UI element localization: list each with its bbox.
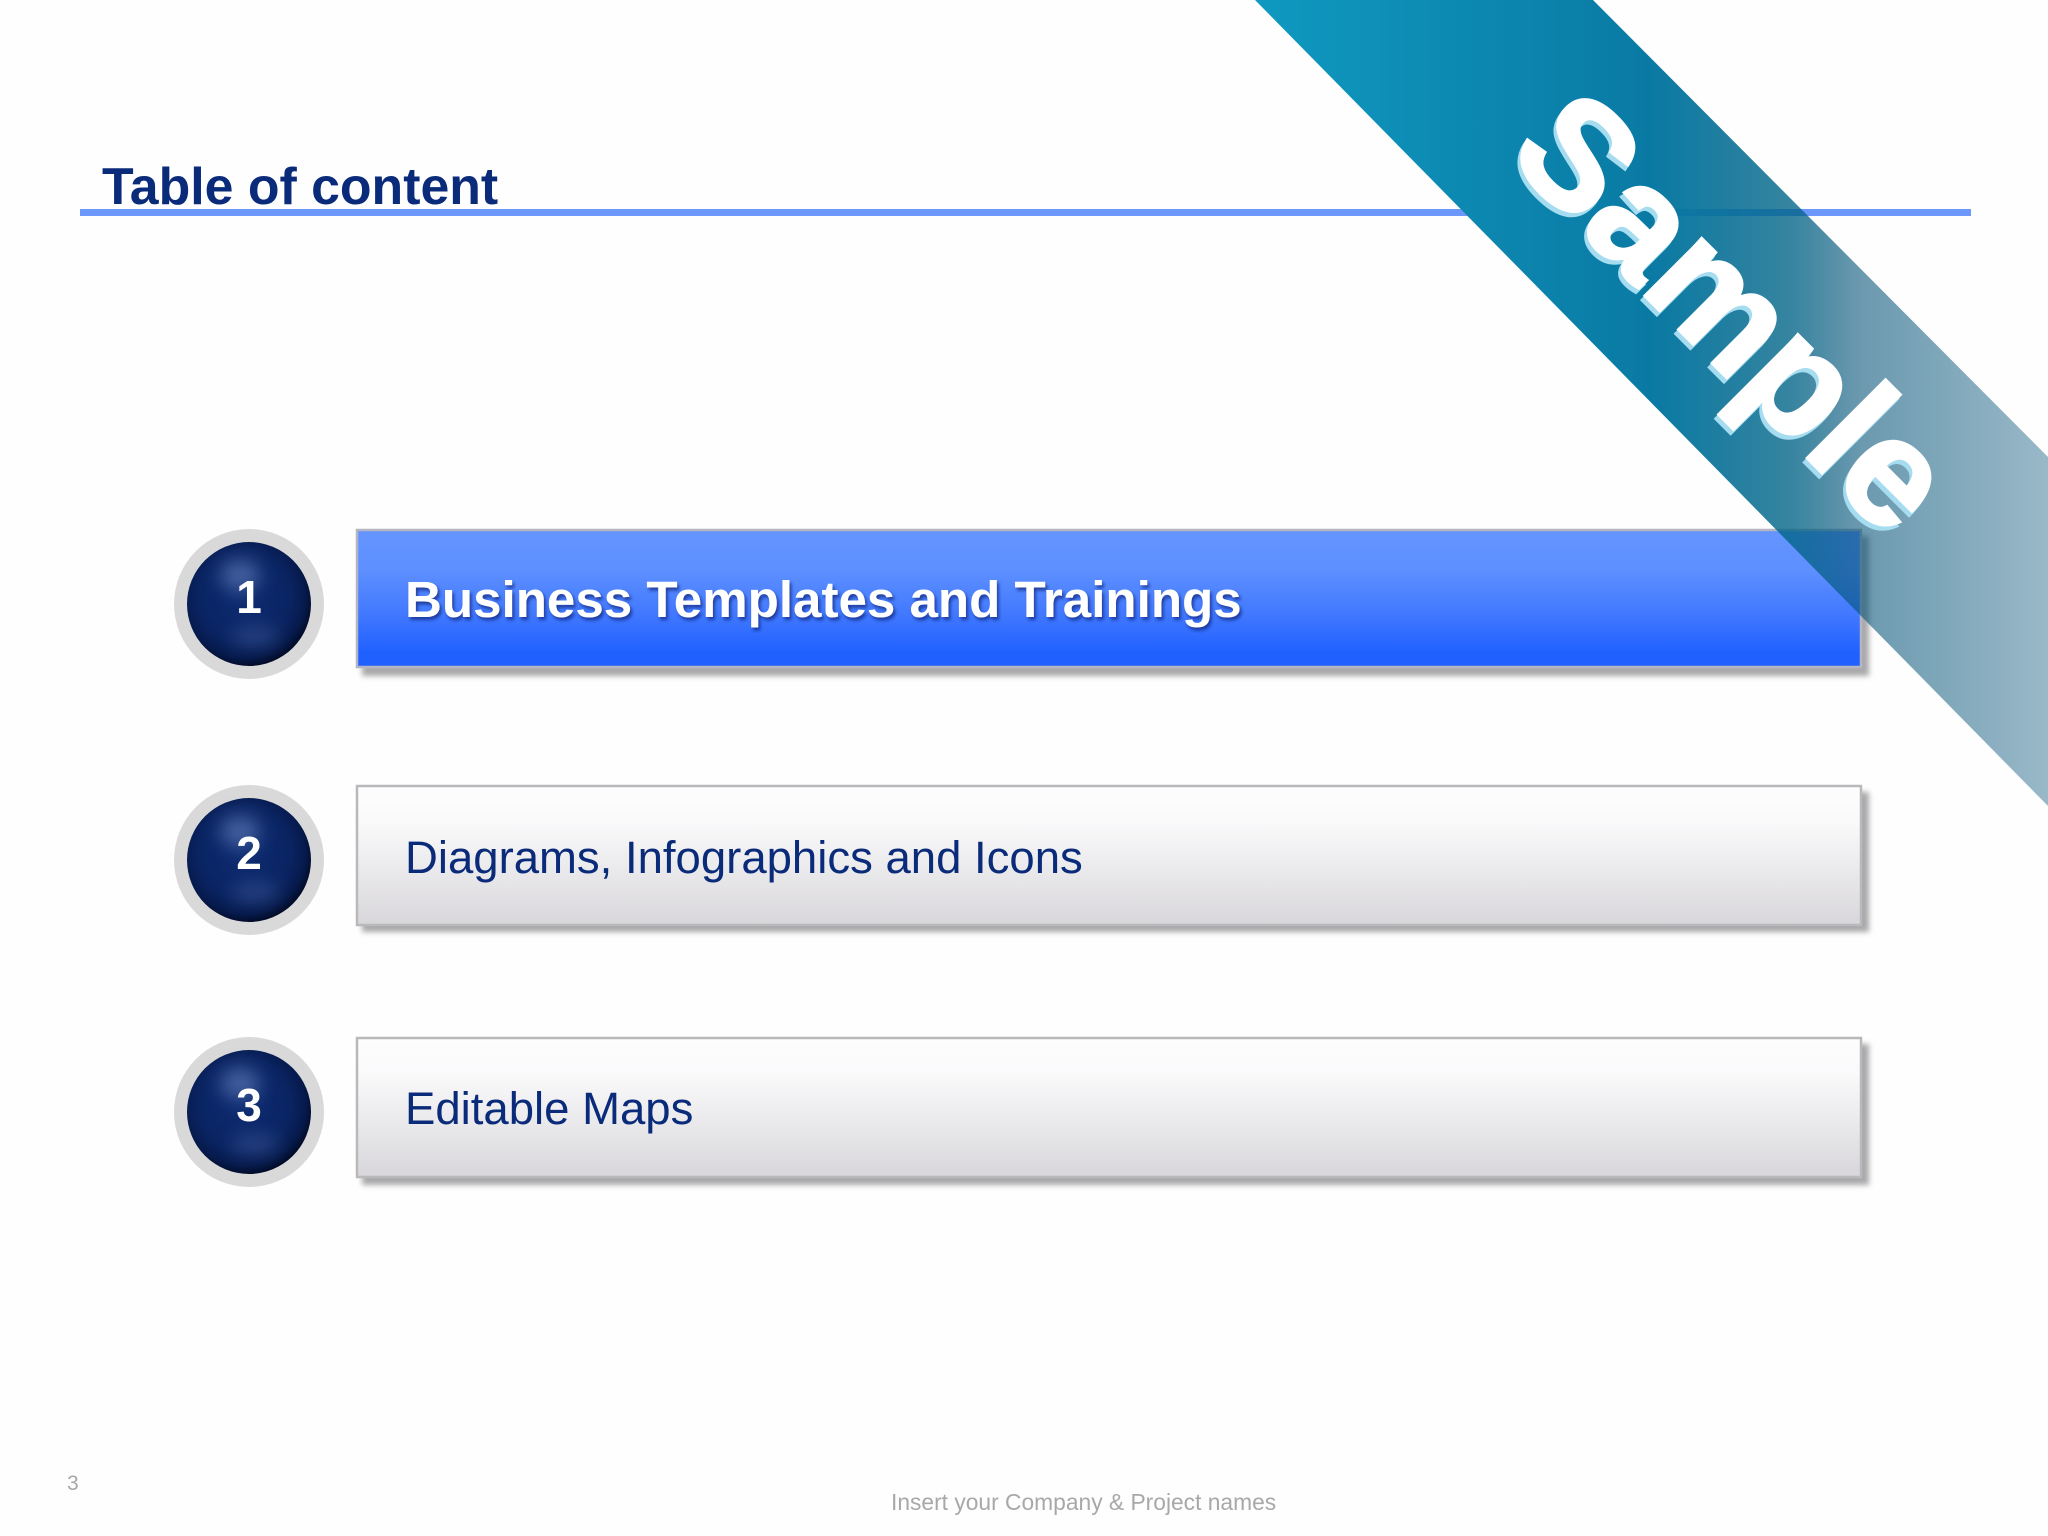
number badge 1: 1 [236,571,262,623]
menu bar 1: business templates: Business Templates and Trainings [405,571,1242,628]
page number: 3 [67,1472,79,1495]
number badge 2 [174,785,324,935]
title underline [80,209,1971,216]
menu bar 1: business templates [357,530,1869,676]
title: Table of content [102,157,498,215]
menu bar 3: editable maps: Editable Maps [405,1083,693,1134]
number badge 3: 3 [236,1079,262,1131]
ribbon label: Sample [1479,63,1985,568]
sample ribbon [1255,0,2048,806]
footer text: Insert your Company & Project names [891,1489,1276,1515]
number badge 2: 2 [236,827,262,879]
menu bar 2: diagrams [357,786,1869,932]
menu bar 3: editable maps [357,1038,1869,1185]
number badge 1 [174,529,324,679]
menu bar 2: diagrams: Diagrams, Infographics and Icons [405,832,1083,883]
number badge 3 [174,1037,324,1187]
ribbon label: Sample [1482,58,1987,564]
